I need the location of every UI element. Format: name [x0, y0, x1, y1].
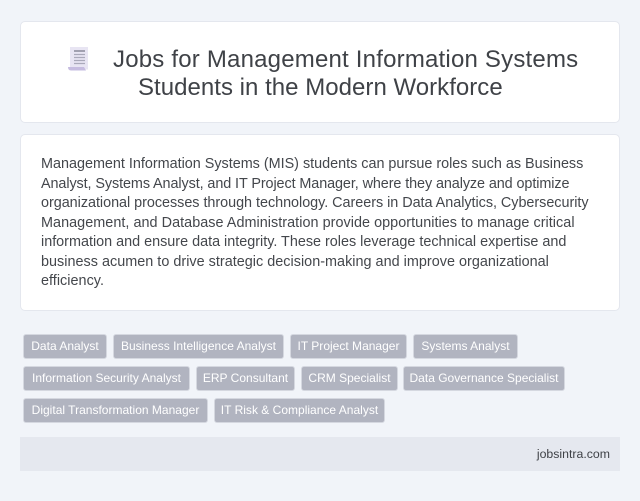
tag: IT Risk & Compliance Analyst — [214, 398, 385, 423]
tag: ERP Consultant: ERP Consultant — [203, 371, 288, 385]
title: Jobs for Management Information Systems — [113, 46, 578, 73]
tag: Systems Analyst: Systems Analyst — [421, 339, 510, 353]
tag: Systems Analyst — [413, 334, 518, 359]
text block: description: Management Information Systems (MIS) students can pursue roles such as Business — [41, 156, 583, 172]
text block: description: Management, and Database Administration provide opportunities to manage critical — [41, 214, 575, 230]
tag: CRM Specialist: CRM Specialist — [308, 371, 391, 385]
text block: description: information and ensure data integrity. These roles leverage technical expertise and — [41, 234, 566, 250]
footer text: jobsintra.com: jobsintra.com — [537, 447, 610, 461]
tag: ERP Consultant — [196, 366, 295, 391]
tag list: job titles — [23, 334, 565, 423]
tag: Digital Transformation Manager: Digital Transformation Manager — [32, 403, 199, 417]
icon: document scroll — [68, 47, 88, 70]
text block: description: efficiency. — [41, 273, 104, 289]
title — [113, 46, 578, 101]
tag: Data Governance Specialist — [403, 366, 565, 391]
tag: Business Intelligence Analyst: Business Intelligence Analyst — [121, 339, 276, 353]
tag: Data Governance Specialist: Data Governance Specialist — [409, 371, 558, 385]
text block: description: organizational processes through technology. Careers in Data Analytics, Cybersecurity — [41, 195, 589, 211]
title: Students in the Modern Workforce — [138, 74, 503, 101]
tag: Business Intelligence Analyst — [113, 334, 284, 359]
tag: IT Project Manager — [290, 334, 407, 359]
tag: Information Security Analyst — [23, 366, 190, 391]
tag: Information Security Analyst: Information Security Analyst — [32, 371, 181, 385]
tag: Data Analyst — [23, 334, 107, 359]
tag: Digital Transformation Manager — [23, 398, 208, 423]
tag: IT Risk & Compliance Analyst: IT Risk & Compliance Analyst — [221, 403, 378, 417]
text block: description — [41, 156, 589, 289]
text block: description: business acumen to drive strategic decision-making and improve organizational — [41, 254, 549, 270]
footer bar — [20, 437, 620, 471]
tag: CRM Specialist — [301, 366, 398, 391]
text block: description: Analyst, Systems Analyst, and IT Project Manager, where they analyze and optimize — [41, 176, 569, 192]
tag: Data Analyst: Data Analyst — [31, 339, 99, 353]
panel: description card — [20, 134, 620, 311]
tag: IT Project Manager: IT Project Manager — [297, 339, 400, 353]
panel: title card — [20, 21, 620, 123]
